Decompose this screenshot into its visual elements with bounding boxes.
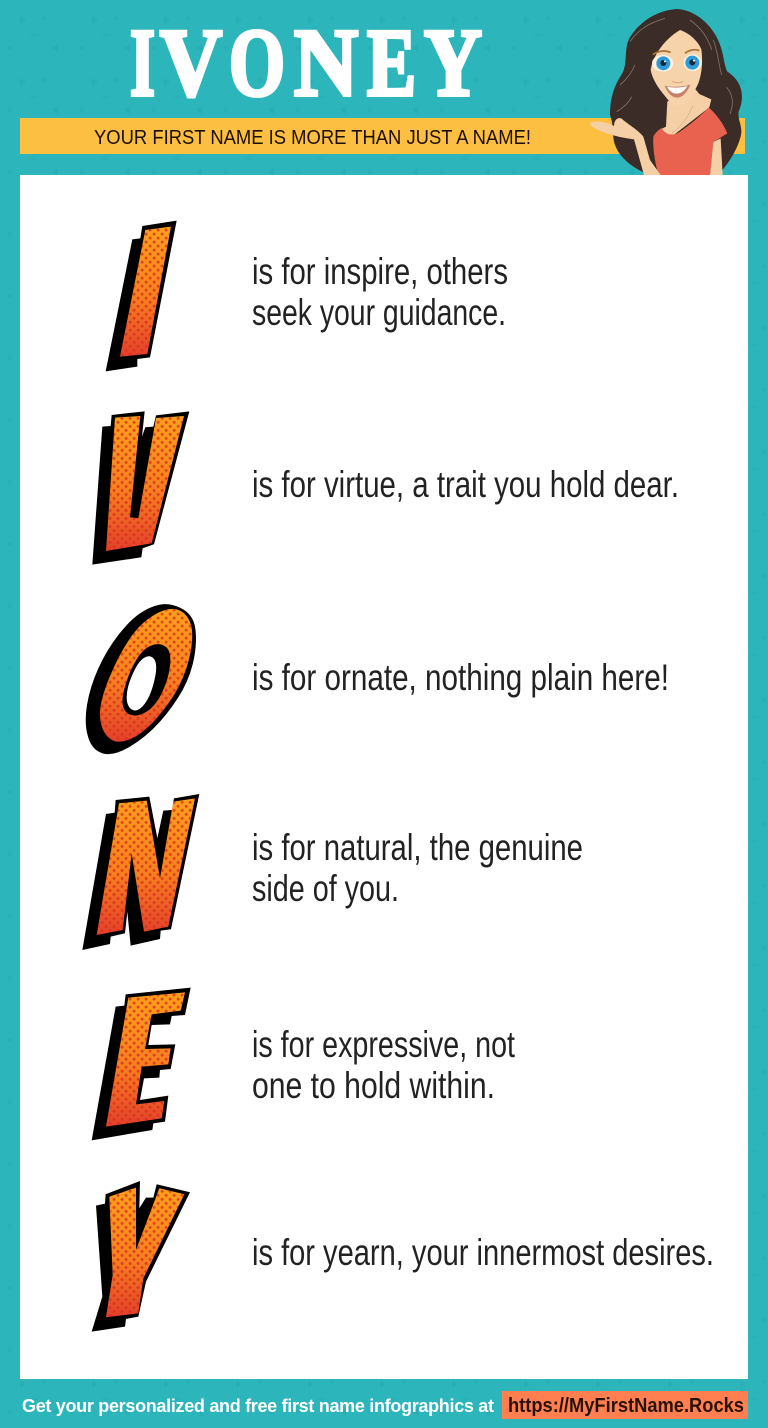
letter E [92,988,191,1140]
text: E line: one to hold within. [252,1065,495,1106]
title: Y [424,9,482,116]
title: E [367,9,416,116]
text: O line: is for ornate, nothing plain here! [252,657,669,698]
letter Y [92,1181,190,1332]
text: I line: is for inspire, others [252,251,508,292]
subtitle banner [20,118,745,154]
footer url badge: https://MyFirstName.Rocks [508,1395,744,1417]
text: E line [252,1024,516,1106]
character illustration [590,9,742,175]
text: N line: side of you. [252,868,399,909]
text: E line: is for expressive, not [252,1024,516,1065]
text: I line: seek your guidance. [252,292,506,333]
footer text: Get your personalized and free first name infographics at [22,1396,494,1416]
white content panel [20,175,748,1379]
subtitle banner: YOUR FIRST NAME IS MORE THAN JUST A NAME! [94,127,531,149]
letter I [106,221,177,371]
letter V [92,411,189,565]
title: O [229,9,285,116]
title [130,9,482,116]
title: N [294,9,358,116]
text: N line: is for natural, the genuine [252,827,583,868]
text: N line [252,827,583,909]
title: I [130,9,155,116]
letter N [82,794,199,950]
letter O [86,604,196,754]
title: V [160,9,222,116]
text: I line [252,251,508,333]
